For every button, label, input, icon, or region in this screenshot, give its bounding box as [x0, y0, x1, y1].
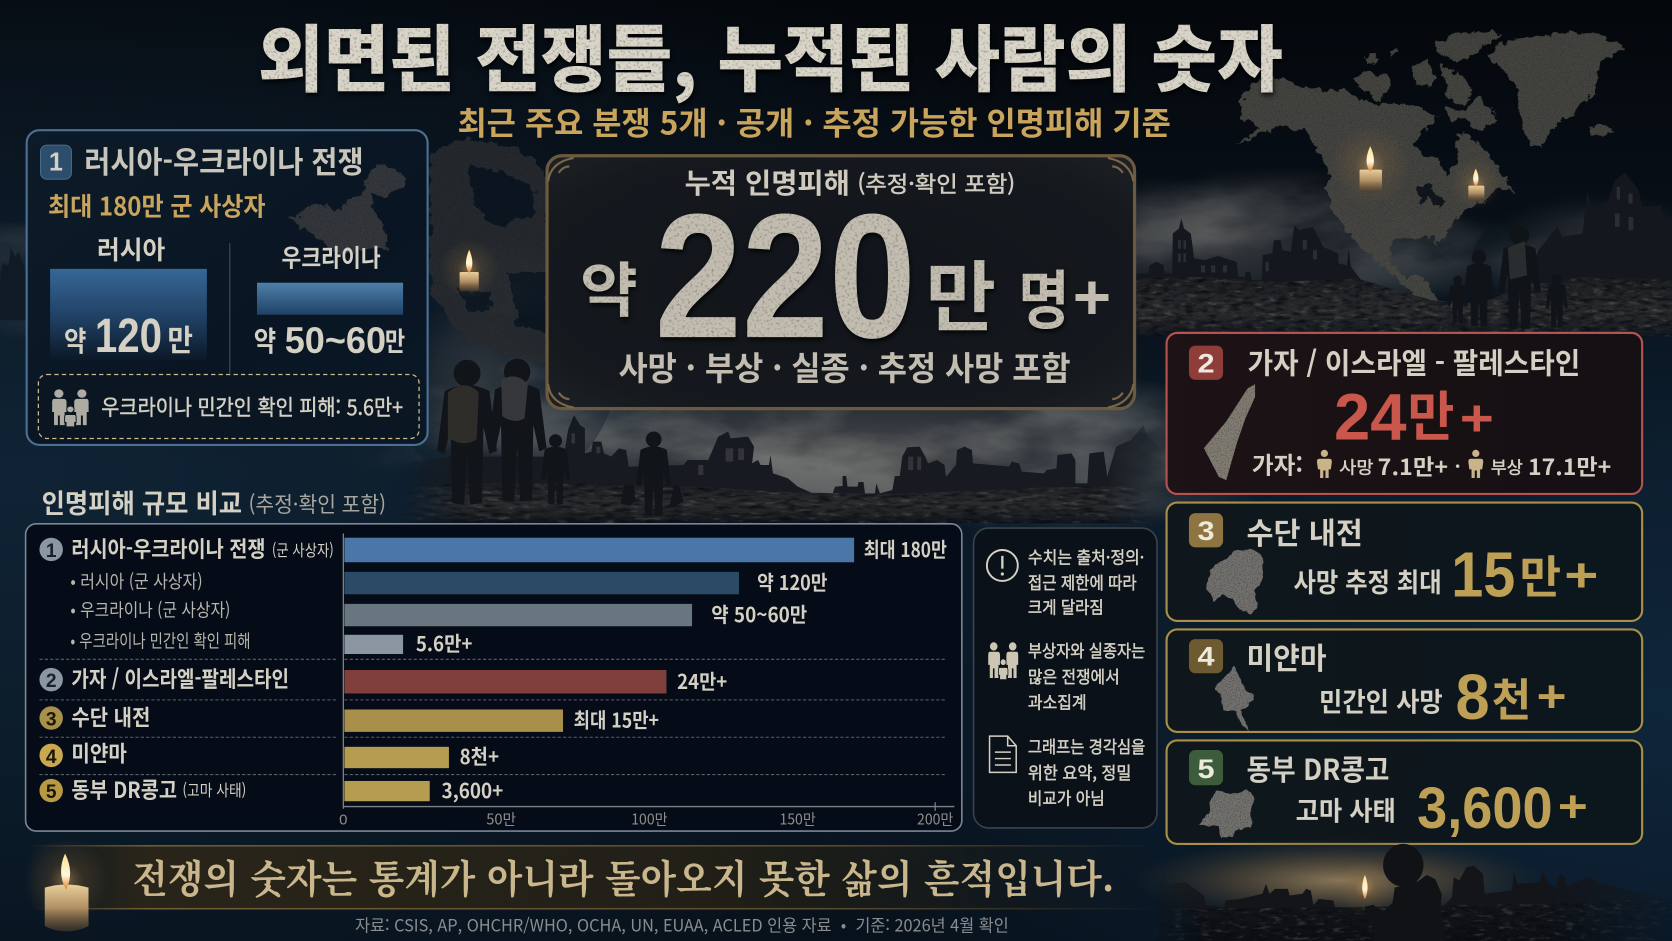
badge 5	[1189, 750, 1223, 785]
card 3 value	[1293, 538, 1598, 610]
ukraine column	[254, 240, 405, 361]
panel: card 1 russia-ukraine	[27, 130, 428, 445]
note 2	[988, 637, 1145, 713]
source line: 자료: CSIS, AP, OHCHR/WHO, OCHA, UN, EUAA, ACLED 인용 자료 • 기준: 2026년 4월 확인	[355, 911, 1009, 936]
panel: card 2 gaza	[1167, 333, 1642, 494]
card 3 value: 만	[1520, 541, 1561, 606]
map: sudan	[1207, 549, 1263, 613]
ruins: center skyline and ground	[400, 415, 1180, 523]
icon: left candle	[23, 838, 109, 931]
card 2 heading: 가자 / 이스라엘 - 팔레스타인	[1248, 341, 1580, 382]
row: russia	[70, 566, 828, 596]
axis labels	[339, 809, 954, 830]
note 3: 그래프는 경각심을	[1028, 733, 1145, 758]
card 5 heading: 동부 DR콩고	[1247, 748, 1389, 789]
world map: left behind plate	[430, 138, 547, 364]
row: gaza: 24만+	[677, 665, 727, 695]
card 5 value: +	[1558, 781, 1588, 832]
russia column	[50, 230, 207, 363]
note 3	[990, 733, 1145, 809]
chart heading: 인명피해 규모 비교	[42, 482, 242, 521]
axis labels: 200만	[917, 809, 954, 830]
world map: north america and greenland	[1235, 32, 1625, 310]
axis labels: 150만	[779, 809, 816, 830]
row: sudan	[39, 700, 659, 734]
row: ukraine: • 우크라이나 (군 사상자)	[70, 597, 230, 623]
row: myanmar: 4	[46, 747, 57, 768]
plate heading: 누적 인명피해	[685, 161, 850, 201]
card 3 value: 15	[1451, 538, 1515, 610]
badge 1	[41, 145, 71, 179]
card 2 value: +	[1460, 389, 1494, 446]
chart axes	[343, 533, 954, 811]
russia column: 약	[64, 319, 86, 359]
people silhouettes: center group	[437, 359, 684, 516]
badge 1: 1	[49, 149, 63, 177]
panel: card 3 sudan	[1167, 503, 1642, 621]
row: myanmar: 미얀마	[71, 737, 127, 769]
divider	[229, 243, 230, 373]
map: russia shape	[291, 163, 405, 253]
note 3: 위한 요약, 정밀	[1028, 759, 1131, 784]
dashed civilian box: 우크라이나 민간인 확인 피해: 5.6만+	[101, 391, 403, 422]
axis labels: 0	[339, 812, 347, 829]
big number: 약	[580, 244, 638, 330]
big number: 만	[926, 236, 996, 347]
row: ukraine civilians: 5.6만+	[416, 627, 472, 657]
row: ukraine: 약 50~60만	[711, 598, 808, 628]
ruins: left edge	[0, 248, 26, 320]
ukraine column: 약	[254, 319, 276, 359]
closing message: 전쟁의 숫자는 통계가 아니라 돌아오지 못한 삶의 흔적입니다.	[132, 849, 1114, 905]
card 2 value: 24	[1334, 381, 1407, 455]
card 3 value: +	[1564, 549, 1598, 601]
ukraine column: 만	[385, 320, 405, 359]
row: gaza: 가자 / 이스라엘-팔레스타인	[71, 662, 289, 694]
row: myanmar: 8천+	[460, 740, 499, 770]
panel: notes	[974, 528, 1157, 828]
center ground	[400, 483, 1180, 523]
note 1	[987, 543, 1144, 618]
panel: card 4 myanmar	[1167, 629, 1642, 733]
row: russia-ukraine total: 러시아-우크라이나 전쟁	[71, 532, 266, 564]
row: sudan: 3	[46, 709, 57, 730]
max label: 최대 180만 군 사상자	[48, 187, 266, 224]
row: gaza	[39, 662, 727, 695]
row separators	[39, 659, 947, 775]
row: russia-ukraine total	[39, 532, 947, 564]
panel: total casualties plate: (추정·확인 포함)	[857, 167, 1015, 199]
dashed civilian box	[38, 374, 419, 438]
panel: total casualties plate	[547, 156, 1135, 409]
note 1: 수치는 출처·정의·	[1028, 543, 1144, 568]
note 2: 부상자와 실종자는	[1028, 637, 1145, 662]
ukraine column: 우크라이나	[282, 240, 381, 275]
badge 4	[1189, 639, 1223, 673]
card 2 breakdown: 17.1만+	[1528, 450, 1611, 482]
map: myanmar	[1213, 666, 1255, 731]
candles on map	[439, 125, 1501, 299]
note 1: 크게 달라짐	[1028, 593, 1104, 618]
row: russia: • 러시아 (군 사상자)	[70, 568, 203, 594]
card 2 breakdown: 가자:	[1252, 447, 1303, 481]
axis labels: 50만	[486, 809, 516, 830]
card 4 value: 8	[1456, 661, 1490, 733]
map: israel palestine	[1204, 384, 1255, 480]
row: sudan: 최대 15만+	[574, 704, 659, 734]
note 2: 과소집계	[1028, 688, 1087, 713]
row: gaza: 2	[46, 671, 57, 692]
badge 4: 4	[1197, 642, 1215, 672]
card 4 value: 천	[1492, 664, 1531, 729]
badge 2	[1189, 346, 1223, 380]
card 2 value	[1334, 374, 1494, 455]
title: 외면된 전쟁들, 누적된 사람의 숫자	[258, 1, 1283, 106]
axis labels: 100만	[631, 809, 668, 830]
candle: small right map	[1450, 158, 1501, 209]
russia column: 러시아	[97, 230, 166, 267]
card 4 value: 민간인 사망	[1319, 681, 1443, 720]
row: dr congo: (고마 사태)	[182, 777, 246, 801]
card 2 value: 만	[1408, 374, 1454, 451]
ukraine column: 50~60	[285, 319, 386, 361]
panel: card 5 dr congo	[1167, 740, 1642, 844]
note 1: 접근 제한에 따라	[1028, 569, 1137, 594]
card 4 value: +	[1537, 672, 1566, 722]
closing banner	[32, 845, 1162, 910]
card 4 value	[1319, 661, 1566, 733]
card 2 breakdown: 부상	[1491, 454, 1523, 479]
skyline silhouette	[1133, 173, 1672, 284]
plate frame	[547, 156, 1135, 409]
row: dr congo	[39, 773, 503, 805]
map: dr congo	[1199, 790, 1255, 838]
row: dr congo: 동부 DR콩고	[71, 773, 177, 805]
child with candle	[1337, 844, 1446, 941]
big number: 220	[655, 177, 916, 375]
card heading: 러시아-우크라이나 전쟁	[84, 137, 364, 182]
card 2 breakdown: 7.1만+	[1378, 450, 1448, 482]
card 4 heading: 미얀마	[1247, 634, 1327, 678]
card 3 heading: 수단 내전	[1247, 509, 1363, 553]
card 2 breakdown	[1252, 447, 1611, 482]
note 2: 많은 전쟁에서	[1028, 663, 1120, 688]
plate caption: 사망 · 부상 · 실종 · 추정 사망 포함	[618, 342, 1071, 390]
big number	[580, 177, 1111, 375]
row: russia: 약 120만	[757, 566, 828, 596]
card 5 value: 3,600	[1417, 776, 1553, 841]
chart heading	[42, 482, 386, 521]
russia column: 120	[95, 310, 162, 363]
row: russia-ukraine total: 최대 180만	[864, 533, 947, 563]
ruins: upper right skyline	[1133, 173, 1672, 337]
card 5 value	[1296, 776, 1588, 841]
row: ukraine civilians	[70, 627, 472, 657]
badge 5: 5	[1197, 754, 1215, 784]
candle: left map	[439, 239, 499, 299]
badge 2: 2	[1197, 348, 1215, 378]
card 2 breakdown: 사망	[1339, 454, 1374, 479]
note 3: 비교가 아님	[1028, 784, 1105, 809]
big number: 명	[1018, 250, 1070, 342]
people silhouettes: right group	[1448, 226, 1568, 330]
card 2 breakdown: ·	[1454, 452, 1461, 480]
chart frame	[26, 524, 962, 831]
subtitle: 최근 주요 분쟁 5개 · 공개 · 추정 가능한 인명피해 기준	[457, 98, 1171, 144]
row: myanmar	[39, 737, 499, 770]
badge 3	[1189, 513, 1223, 547]
card 3 value: 사망 추정 최대	[1293, 561, 1442, 600]
big number: +	[1073, 261, 1111, 333]
candle: large right map	[1330, 125, 1411, 206]
bottom ruins and ground	[1156, 843, 1665, 941]
ground	[1133, 277, 1672, 337]
center skyline silhouette	[400, 415, 1180, 497]
card 5 value: 고마 사태	[1296, 789, 1396, 828]
badge 3: 3	[1197, 516, 1215, 546]
row: russia-ukraine total: 1	[46, 541, 57, 562]
row: ukraine civilians: • 우크라이나 민간인 확인 피해	[70, 628, 251, 654]
row: russia-ukraine total: (군 사상자)	[272, 537, 334, 561]
card frame	[27, 130, 428, 445]
row: ukraine	[70, 597, 808, 628]
row: sudan: 수단 내전	[71, 700, 150, 732]
chart heading: (추정·확인 포함)	[248, 488, 386, 519]
row: dr congo: 5	[46, 782, 57, 803]
row: dr congo: 3,600+	[441, 774, 503, 804]
russia column: 만	[167, 316, 193, 360]
panel: comparison bar chart	[26, 524, 962, 831]
